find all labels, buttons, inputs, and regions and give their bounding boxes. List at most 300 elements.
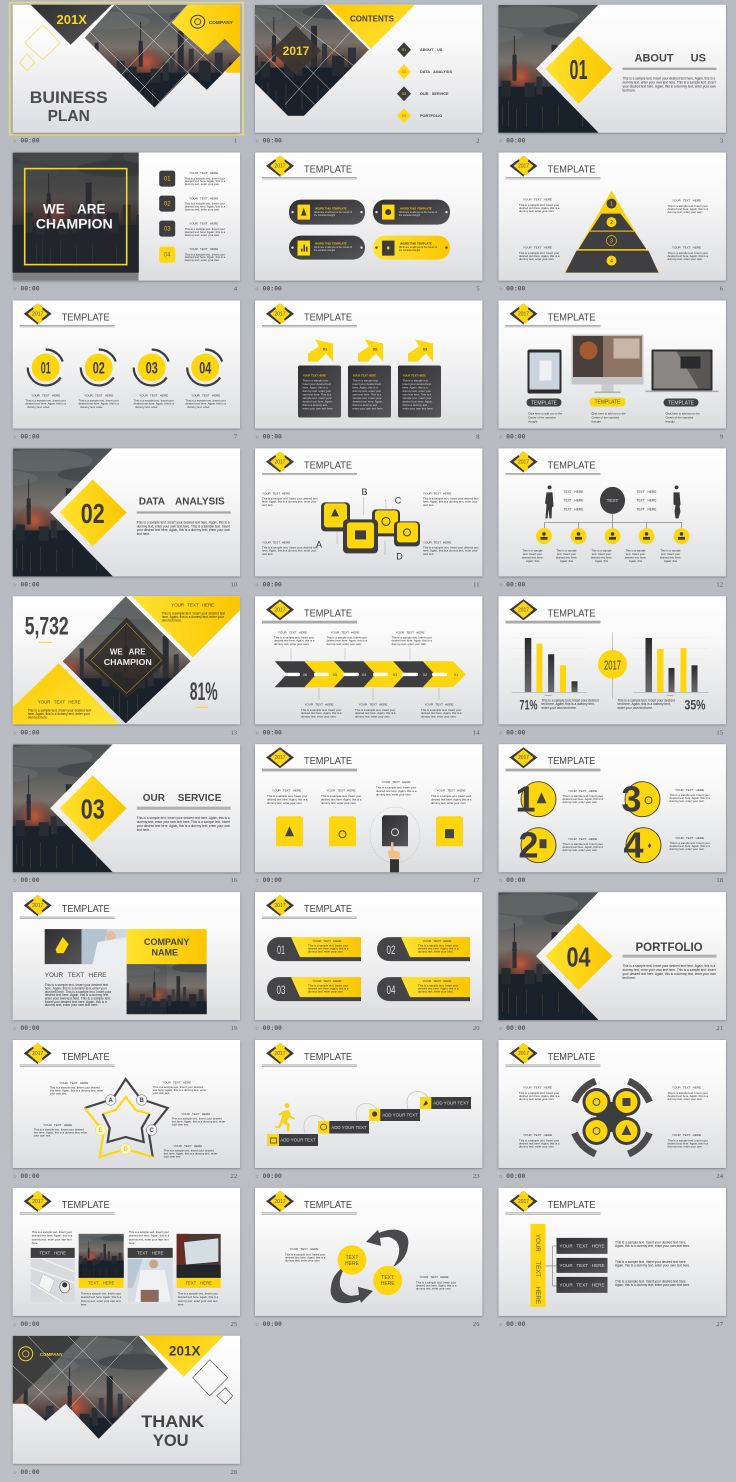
bottom text blocks: desired text here. Again, this is a (355, 711, 396, 715)
left bar chart (512, 637, 586, 697)
caption 2: ☆ 00:00 (255, 138, 282, 145)
text top left: dummy text, enter your own. (519, 209, 555, 213)
card 1: dummy text, enter your (302, 389, 331, 393)
caption 11 (255, 581, 480, 588)
card 2: desired text here. Again, (352, 400, 383, 404)
header (262, 1191, 357, 1215)
left text: text here. Again, this is a dummy text, (542, 702, 595, 706)
caption 28: 28 (231, 1469, 238, 1476)
yellow diamond (546, 923, 612, 990)
text block 1: YOUR TEXT HERE (568, 789, 597, 793)
photo diamonds (84, 4, 240, 108)
paragraph 2: This is a sample text. Insert your (81, 1291, 121, 1295)
header: TEMPLATE (548, 1199, 596, 1211)
card 1: YOUR TEXT HERE (302, 374, 326, 378)
card 3: dummy text, enter your (402, 389, 431, 393)
text top right: desired text here. Again, this is a (668, 1094, 708, 1098)
bottom text blocks: This is a sample text. Insert your (355, 708, 395, 712)
text block 2: YOUR TEXT HERE (326, 789, 356, 793)
paragraph: dummy text, enter your own text here. (45, 1003, 98, 1007)
caption 7 (13, 434, 238, 440)
top text: This is a sample text. Insert your desired text (162, 611, 225, 615)
slide 6: pyramid (498, 153, 726, 281)
item 1: desired text here. Again, this is a (185, 179, 226, 183)
text block 3: YOUR TEXT HERE (675, 788, 704, 792)
text right bottom: This is a sample text. Insert your desired text (423, 545, 478, 549)
card 2: sample text. Insert your (352, 396, 382, 400)
text right (416, 1275, 457, 1291)
card 2: this is a dummy text, (352, 403, 378, 407)
text block 2: This is a sample text. Insert your (321, 794, 361, 798)
step 4 (420, 1097, 471, 1109)
text block 4: This is a sample text. Insert your (670, 841, 710, 845)
caption 20: 20 (473, 1025, 480, 1032)
header: TEMPLATE (304, 1051, 352, 1063)
text bottom right: YOUR TEXT HERE (672, 246, 701, 250)
stat 81% (190, 678, 218, 708)
selection border (10, 3, 243, 135)
row 3: This is a sample text. Insert your desired text here. (615, 1279, 686, 1283)
slide background (13, 5, 240, 133)
divider (137, 511, 231, 514)
paragraph: text here. (622, 976, 636, 980)
chevron band: 05 (333, 672, 338, 677)
text A: This is a sample text. Insert your desired (50, 1086, 100, 1090)
node text: text. Insert your (661, 552, 680, 556)
ring 4 (187, 349, 222, 386)
item 3 (159, 221, 226, 237)
text blocks: dummy text, enter. (27, 405, 50, 409)
node text: text. Insert your (592, 552, 611, 556)
header: TEMPLATE (304, 903, 352, 915)
slide background (13, 744, 240, 872)
block D: D (396, 551, 403, 561)
caption 2: 2 (476, 138, 480, 145)
header: 2017 (274, 312, 286, 318)
top text blocks: This is a sample text. Insert your (274, 635, 314, 639)
paragraph: dummy text, enter your own text here. This is a sample text. Insert (137, 524, 230, 528)
text blocks: dummy text, enter. (187, 405, 210, 409)
caption 19 (13, 1025, 238, 1032)
circle 1 (515, 779, 556, 820)
card 3: This is a sample text. (402, 378, 429, 382)
text block 4: YOUR TEXT HERE (675, 836, 704, 840)
title: BUINESS (30, 88, 108, 107)
pyramid: 4 (610, 258, 613, 264)
text bottom left: desired text here. Again, this is a (519, 254, 560, 258)
center circle: TEXT (607, 498, 619, 503)
text block 2 (562, 837, 603, 852)
top text blocks: dummy text, enter your own. (392, 642, 427, 646)
item 1: dummy text, enter your own. (185, 182, 220, 186)
text E: This is a sample text. Insert your desired (34, 1128, 84, 1132)
step 3: ADD YOUR TEXT (382, 1112, 418, 1118)
inner diamond (85, 617, 168, 698)
slide background (13, 448, 240, 576)
text left top: here. Again, this is a dummy text, enter your (262, 500, 317, 504)
top text blocks: This is a sample text. Insert your (392, 635, 432, 639)
caption 28: ☆ 00:00 (13, 1469, 40, 1476)
connector tree (544, 513, 682, 530)
header (262, 895, 357, 919)
slide background (498, 1188, 726, 1316)
header: TEMPLATE (62, 903, 110, 915)
item 4: 04 (164, 253, 171, 259)
tab 2: This is a sample text. Insert your (418, 944, 458, 948)
card 1: desired text here. Again, (302, 400, 333, 404)
text D: text here. Again, this is a dummy text, enter (164, 1151, 217, 1155)
dotted connectors (291, 648, 439, 700)
text E (34, 1123, 87, 1137)
text right: dummy text, enter your own. (416, 1287, 452, 1291)
header (20, 1043, 115, 1067)
tab 3: This is a sample text. Insert your (308, 984, 348, 988)
caption 5: ☆ 00:00 (255, 286, 282, 293)
slide 20: four tabs (255, 892, 482, 1020)
top text blocks: dummy text, enter your own. (274, 642, 310, 646)
subheading: YOUR TEXT HERE (45, 972, 107, 979)
node text: text. Insert your (523, 552, 542, 556)
text top right: dummy text, enter your own. (668, 1097, 703, 1101)
top text blocks: desired text here. Again, this is a (274, 639, 315, 643)
card 2: YOUR TEXT HERE (352, 374, 376, 378)
slide background (13, 1336, 240, 1464)
row 1: This is a sample text. Insert your desired text here. (615, 1240, 686, 1244)
photo (498, 4, 598, 133)
text bottom left: YOUR TEXT HERE (523, 246, 552, 250)
caption 27: ☆ 00:00 (498, 1321, 526, 1328)
caption 23: ☆ 00:00 (255, 1173, 282, 1180)
top text blocks: This is a sample text. Insert your (326, 635, 367, 639)
header: 2017 (518, 607, 529, 613)
labels: TEMPLATE (594, 400, 621, 406)
text right top (423, 491, 479, 507)
text block 4: YOUR TEXT HERE (436, 789, 466, 793)
headline line 2: CHAMPION (36, 217, 113, 232)
caption 5 (255, 286, 480, 293)
text left bottom: This is a sample text. Insert your desired text (262, 545, 318, 549)
text block 4: This is a sample text. Insert your (431, 794, 471, 798)
text B: This is a sample text. Insert your desired (153, 1085, 203, 1089)
slide 26: cycle arrows (255, 1188, 482, 1316)
slide 19: company name (12, 892, 242, 1022)
text left bottom: own text. (262, 552, 273, 556)
header (506, 1043, 600, 1067)
text blocks: YOUR TEXT HERE (139, 394, 168, 398)
card 1: this is a dummy text, (302, 403, 328, 407)
text A: your own text. (50, 1091, 67, 1095)
label 2: TEXT HERE (88, 1281, 115, 1286)
text blocks: This is a sample text. Insert your (79, 398, 119, 402)
header: 2017 (274, 459, 286, 465)
slide background (255, 1040, 482, 1168)
text B: your own text. (153, 1091, 170, 1095)
captions: thought (528, 420, 538, 424)
text bottom left (519, 1133, 560, 1148)
laptop (646, 350, 718, 392)
slide 14: chevron timeline (255, 596, 482, 724)
slide 10: data analysis (12, 448, 242, 578)
text block 3: YOUR TEXT HERE (381, 780, 411, 784)
header: 2017 (32, 903, 43, 909)
node text: This is a sample (660, 548, 681, 552)
text top left: desired text here. Again, this is a (519, 206, 560, 210)
slide 21: portfolio (497, 892, 728, 1022)
paragraph: This is a sample text. Insert your desired text here. Again, this is a (137, 816, 230, 820)
circle 2 (518, 825, 556, 866)
item 1: YOUR TEXT HERE (189, 171, 218, 175)
item 3: desired text here. Again, this is a (185, 230, 226, 234)
header: 2017 (274, 607, 286, 613)
text top right: YOUR TEXT HERE (672, 199, 701, 203)
caption 24 (498, 1173, 724, 1180)
bottom text blocks: YOUR TEXT HERE (424, 702, 454, 706)
yellow bottom left (13, 663, 120, 724)
company tile: COMPANY (144, 937, 189, 947)
header: 2017 (274, 164, 286, 170)
text bottom left (519, 246, 560, 261)
paragraph 2: here. (81, 1303, 87, 1307)
card 3: YOUR TEXT HERE (402, 374, 426, 378)
card 2: enter your own text here. (352, 406, 384, 410)
text left: dummy text, enter your own. (285, 1259, 321, 1263)
node text: This is a sample (625, 548, 646, 552)
dotted connectors (337, 497, 386, 554)
paragraph 4: here. (178, 1303, 184, 1307)
card 1: This is a sample text. (302, 378, 329, 382)
caption 6: 6 (720, 286, 724, 293)
section title: ABOUT US (634, 52, 706, 64)
row 1 (556, 1238, 690, 1254)
paragraph 3: dummy text, enter your own text (129, 1237, 169, 1241)
slide background (498, 5, 726, 133)
box 2 (329, 816, 356, 846)
text block 1: YOUR TEXT HERE (272, 789, 301, 793)
yellow triangle (143, 1336, 224, 1377)
node text: Again, this (629, 559, 643, 563)
step 2 (318, 1121, 369, 1134)
bottom text: here. Again, this is a dummy text, enter your (28, 712, 91, 716)
pill 3: Click here to add you to the Center of (314, 247, 352, 249)
champion text: WE ARE (110, 647, 146, 656)
pill 2: the narrative thought (399, 214, 420, 217)
captions: Click here to add you to the (528, 412, 562, 416)
text block 3 (670, 788, 710, 803)
caption 22: 22 (231, 1173, 237, 1180)
text C (172, 1112, 225, 1126)
text block 4 (431, 789, 472, 805)
tab 1: 01 (277, 943, 285, 957)
contents list: OUR SERVICE (420, 92, 449, 96)
pill 1 (289, 200, 365, 225)
caption 13 (13, 729, 238, 736)
caption 1 (13, 138, 237, 145)
text D: This is a sample text. Insert your desired (164, 1148, 214, 1152)
connector (546, 1246, 556, 1286)
tab 4: 04 (386, 983, 396, 997)
paragraph 1: here. (32, 1241, 38, 1245)
photo (12, 744, 112, 872)
label 1 (31, 1248, 75, 1258)
text top left: YOUR TEXT HERE (523, 198, 552, 202)
slide 5: pill buttons (255, 153, 482, 281)
step 3 (369, 1109, 420, 1121)
star badges: D (124, 1147, 129, 1153)
ring 3 (134, 349, 169, 386)
pyramid: 1 (610, 201, 613, 207)
bottom text: This is a sample text. Insert your desired text (28, 708, 91, 712)
city photo (78, 1234, 124, 1278)
header (20, 304, 115, 327)
bottom text blocks: dummy text, enter your own. (301, 714, 337, 718)
card 3: own text here. This is a (402, 392, 432, 396)
text bottom left: This is a sample text. Insert your (519, 251, 559, 255)
header: TEMPLATE (548, 312, 596, 324)
bottom text: YOUR TEXT HERE (38, 699, 81, 704)
header: TEMPLATE (62, 1051, 110, 1063)
arcs (304, 1092, 428, 1133)
tab 1: This is a sample text. Insert your (308, 944, 348, 948)
text bottom right: This is a sample text. Insert your (668, 251, 708, 255)
header: 2017 (274, 903, 286, 909)
text block 2 (321, 789, 362, 805)
contents list: 03 (402, 91, 407, 96)
slide 27: list with vertical bar (498, 1188, 726, 1316)
caption 21: ☆ 00:00 (498, 1025, 526, 1032)
selected box with dotted ring (370, 807, 420, 863)
header: 2017 (32, 1051, 43, 1057)
text blocks: desired text here. Again, this is a (78, 402, 119, 406)
text block 3: dummy text, enter your own. (670, 799, 705, 803)
slide 11: linked blocks (255, 448, 482, 576)
2017 badge: 2017 (604, 657, 621, 672)
header: 2017 (518, 755, 529, 761)
circle bottom (373, 1266, 402, 1295)
bottom text: own text here. (28, 716, 48, 720)
text right top: YOUR TEXT HERE (423, 491, 451, 495)
header (262, 304, 357, 327)
item 1: 01 (164, 177, 171, 183)
header (262, 599, 357, 624)
divider (137, 807, 231, 810)
node text: desired text here. (522, 556, 544, 560)
labels (526, 398, 698, 406)
label 4 (177, 1278, 221, 1288)
text E: your own text. (34, 1133, 51, 1137)
top text: YOUR TEXT HERE (171, 602, 214, 607)
block B (343, 487, 378, 553)
caption 8: 8 (476, 434, 480, 440)
text block 3: dummy text, enter your own. (376, 792, 412, 796)
text right bottom: YOUR TEXT HERE (423, 540, 451, 544)
card 3: sample text. Insert your (402, 396, 432, 400)
text C: YOUR TEXT HERE (181, 1112, 210, 1116)
slide 1: business plan cover (8, 2, 244, 136)
row 2 (556, 1258, 690, 1273)
section title: PORTFOLIO (636, 942, 703, 954)
slide background (498, 1040, 726, 1168)
text bottom left: YOUR TEXT HERE (523, 1133, 552, 1137)
paragraph 3: This is a sample text. Insert your (129, 1230, 169, 1234)
pill 4 (373, 236, 450, 260)
header (20, 895, 115, 919)
text right bottom: here. Again, this is a dummy text, enter your (423, 549, 478, 553)
slide background (255, 596, 482, 724)
stat 71%: 71% (520, 696, 538, 712)
runner (275, 1103, 295, 1132)
you: YOU (153, 1432, 189, 1450)
ring 3: 03 (146, 358, 158, 378)
paragraph 3: here. (129, 1241, 135, 1245)
captions: Center of the narrative (592, 416, 620, 420)
circle top (338, 1245, 366, 1275)
header: TEMPLATE (62, 1199, 110, 1211)
header: TEMPLATE (548, 164, 596, 176)
text blocks: YOUR TEXT HERE (31, 394, 60, 398)
company logo: COMPANY (40, 1352, 63, 1357)
text bottom right (668, 246, 708, 261)
node text: Again, this (664, 559, 678, 563)
caption 13: ☆ 00:00 (13, 729, 40, 736)
text block 3: desired text here. Again, this is a (376, 789, 417, 793)
row 2: This is a sample text. Insert your desired text here. (615, 1260, 686, 1264)
headline: WE ARE (43, 201, 105, 216)
text top left: This is a sample text. Insert your (519, 1091, 559, 1095)
text block 3: desired text here. Again, this is a (670, 796, 710, 800)
pyramid (564, 191, 660, 273)
block D (394, 521, 420, 561)
201X label: 201X (169, 1343, 200, 1358)
text blocks: YOUR TEXT HERE (191, 394, 220, 398)
captions: thought (666, 420, 675, 424)
text B: YOUR TEXT HERE (162, 1080, 191, 1084)
text right top: here. Again, this is a dummy text, enter your (423, 500, 478, 504)
node text: This is a sample (522, 548, 543, 552)
caption 1: ☆ 00:00 (13, 138, 40, 145)
caption 3 (498, 138, 724, 145)
text block 1 (267, 789, 308, 805)
caption 18: 18 (716, 877, 724, 884)
slide background (13, 1040, 240, 1168)
paragraph 4: dummy text, enter your own text (178, 1299, 218, 1303)
caption 27: 27 (716, 1321, 724, 1328)
pill 4: ♦ (386, 245, 390, 252)
paragraph: your desired text here. Again, this is a dummy text, enter your own (622, 972, 716, 976)
slide 18: numbered circles (498, 744, 726, 872)
pill 3: the narrative thought (314, 249, 335, 252)
row 3: YOUR TEXT HERE (559, 1282, 605, 1287)
captions (528, 412, 700, 424)
caption 3: ☆ 00:00 (498, 138, 526, 145)
caption 7: ☆ 00:00 (13, 434, 40, 440)
card 3: enter your own text here. (402, 406, 434, 410)
right text: text here. Again, this is a dummy text, (618, 702, 671, 706)
company logo (19, 1347, 63, 1361)
text right bottom: own text. (423, 552, 434, 556)
slide background (255, 153, 482, 281)
text D: YOUR TEXT HERE (173, 1144, 202, 1148)
header: TEMPLATE (304, 607, 352, 619)
slide 23: steps (255, 1040, 482, 1168)
contents list (397, 42, 452, 123)
tab 3: 03 (276, 983, 286, 997)
item 4: desired text here. Again, this is a (185, 255, 226, 259)
star badges: B (140, 1098, 145, 1104)
paragraph: This is a sample text. Insert your desired text (45, 983, 108, 987)
caption 20: ☆ 00:00 (255, 1025, 282, 1032)
text left: This is a sample text. Insert your (285, 1252, 325, 1256)
caption 26: 26 (473, 1321, 480, 1328)
